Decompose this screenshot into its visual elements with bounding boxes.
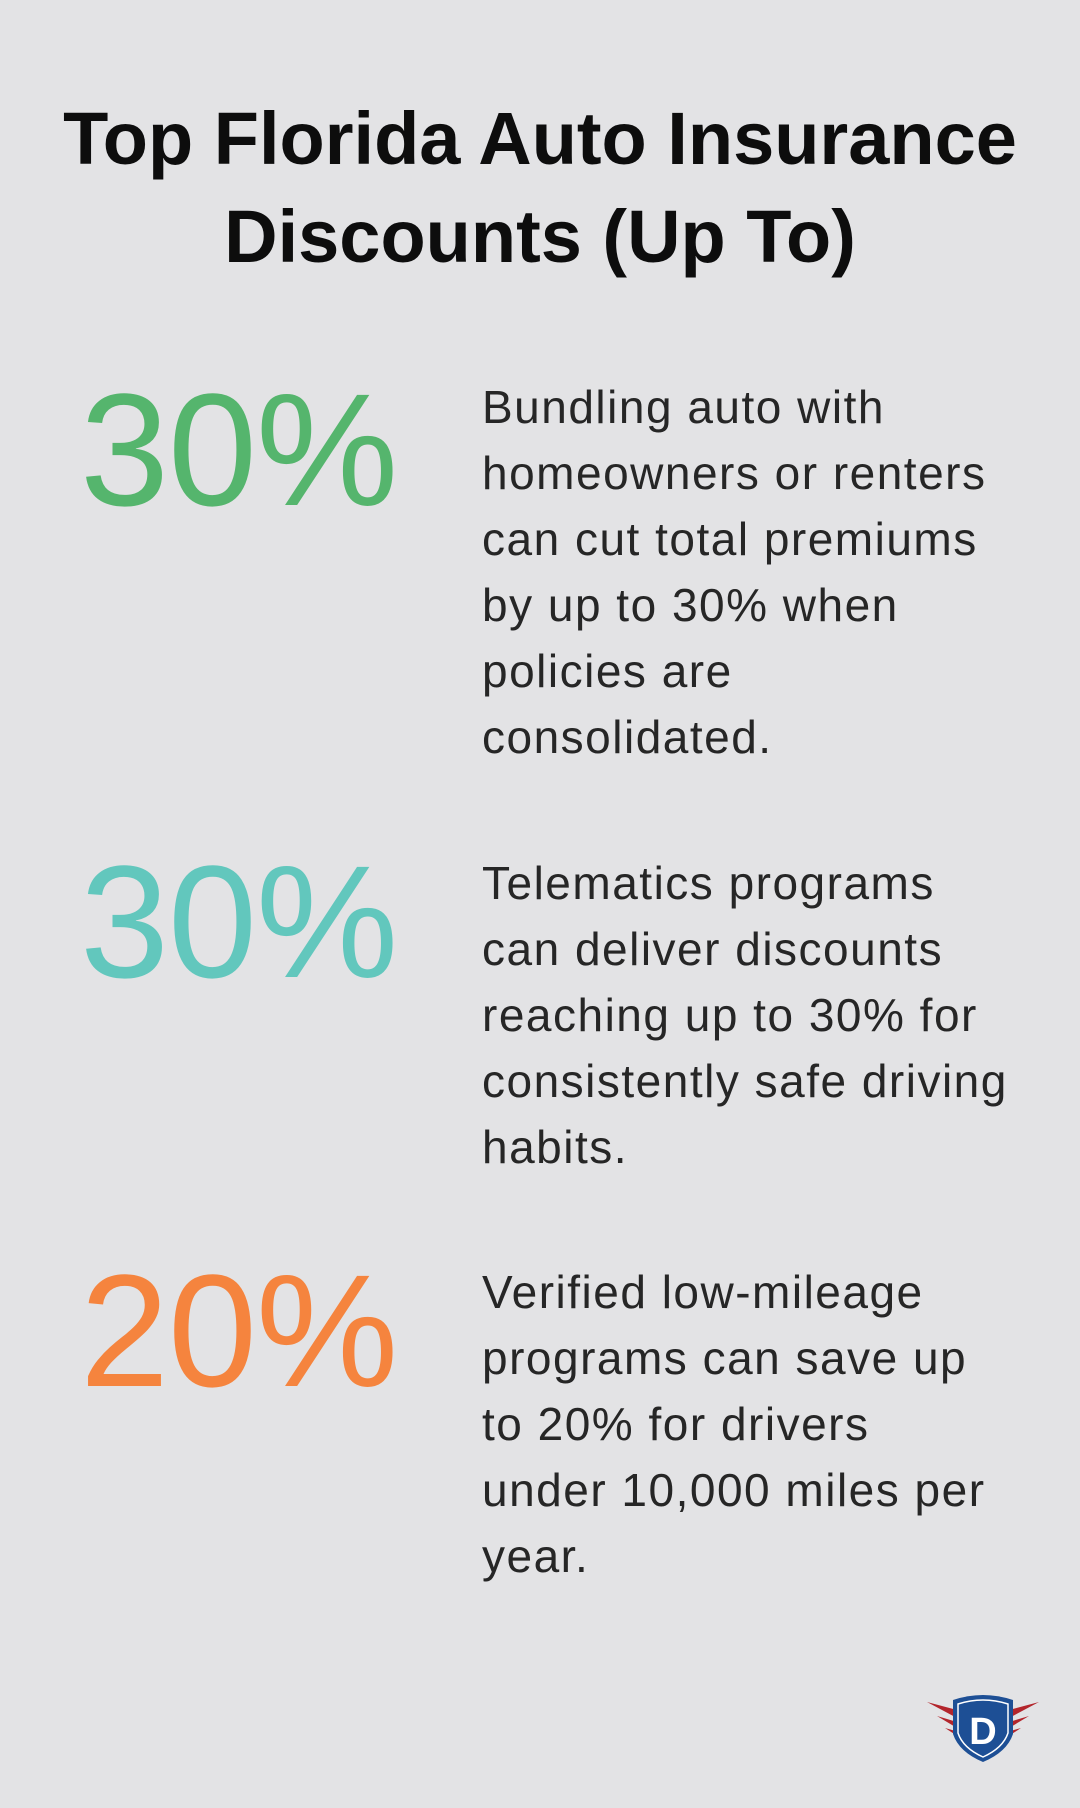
stat 2 description	[482, 857, 1008, 1173]
stat 2 description: habits.	[482, 1121, 628, 1173]
stat 1 number: 30%	[80, 360, 397, 539]
stat 3 number: 20%	[80, 1241, 397, 1420]
stat 1 description: homeowners or renters	[482, 447, 986, 499]
stat 1 description: Bundling auto with	[482, 381, 885, 433]
stat 2 number: 30%	[80, 832, 397, 1011]
stat 1 description: by up to 30% when	[482, 579, 899, 631]
stat 3 description: Verified low-mileage	[482, 1266, 924, 1318]
stat 3 description	[482, 1266, 986, 1582]
stat 1 description	[482, 381, 986, 763]
stat 2 description: consistently safe driving	[482, 1055, 1008, 1107]
title: Top Florida Auto Insurance	[63, 97, 1017, 180]
stat 1 description: consolidated.	[482, 711, 773, 763]
logo: D	[969, 1711, 997, 1753]
stat 3 description: year.	[482, 1530, 589, 1582]
stat 1 description: policies are	[482, 645, 733, 697]
stat 3 description: under 10,000 miles per	[482, 1464, 986, 1516]
stat 1 description: can cut total premiums	[482, 513, 978, 565]
stat 2 description: reaching up to 30% for	[482, 989, 978, 1041]
stat 3 description: to 20% for drivers	[482, 1398, 869, 1450]
title	[63, 97, 1017, 278]
logo	[927, 1695, 1039, 1762]
title: Discounts (Up To)	[224, 195, 856, 278]
stat 2 description: can deliver discounts	[482, 923, 943, 975]
stat 2 description: Telematics programs	[482, 857, 935, 909]
stat 3 description: programs can save up	[482, 1332, 967, 1384]
